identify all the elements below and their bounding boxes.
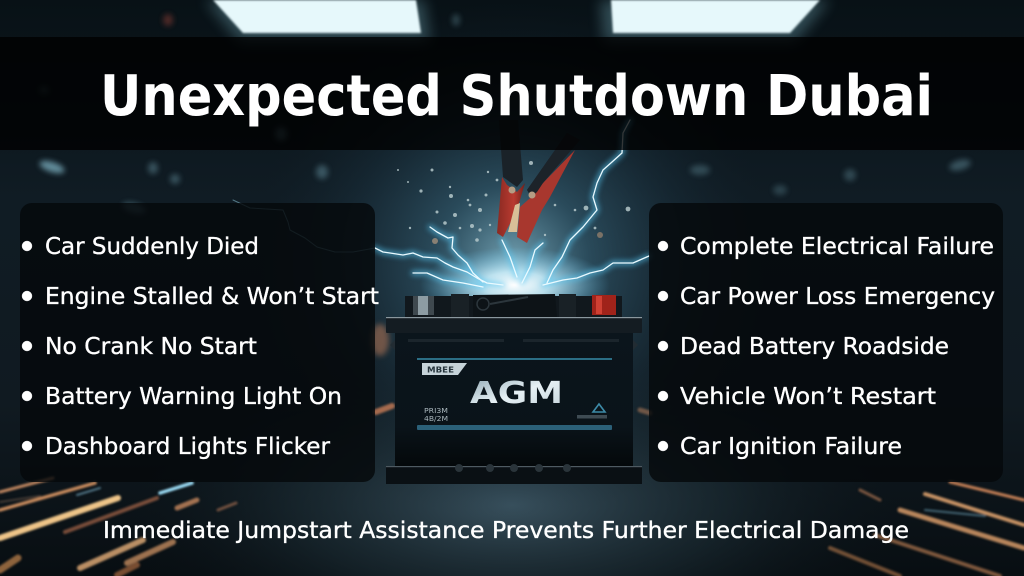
bokeh dots xyxy=(38,14,972,216)
battery: top ridge xyxy=(405,296,622,317)
battery: body xyxy=(395,333,633,467)
battery: negative terminal xyxy=(413,296,434,315)
floor light streaks: left xyxy=(0,406,392,575)
battery: spec text: PRI3M xyxy=(424,407,448,415)
clamp: left handle xyxy=(499,120,523,187)
item: dashboard lights: Dashboard Lights Flicker xyxy=(45,432,330,460)
battery: top stripe xyxy=(417,358,612,360)
item: car suddenly died: Car Suddenly Died xyxy=(45,232,259,260)
footer message: Immediate Jumpstart Assistance Prevents Further Electrical Damage xyxy=(103,516,909,544)
lightning: glow xyxy=(375,120,649,287)
item: ignition failure: Car Ignition Failure xyxy=(680,432,902,460)
item: battery warning: Battery Warning Light On xyxy=(45,382,342,410)
header band xyxy=(0,37,1024,150)
title: Unexpected Shutdown Dubai xyxy=(100,64,933,129)
item: dead battery: Dead Battery Roadside xyxy=(680,332,949,360)
battery: base xyxy=(386,467,642,484)
battery: positive terminal xyxy=(592,295,616,315)
floor light streaks: right xyxy=(640,410,1024,576)
sparks xyxy=(397,161,630,244)
energy glow behind battery xyxy=(420,247,610,323)
lightning: white core xyxy=(375,120,649,287)
battery: spec text xyxy=(424,407,448,423)
item: won't restart: Vehicle Won’t Restart xyxy=(680,382,936,410)
battery: AGM logo: AGM xyxy=(470,376,563,411)
battery: label tag xyxy=(422,363,467,375)
battery: bottom stripe xyxy=(417,425,612,430)
clamp: pivot rivets xyxy=(508,186,516,194)
jumper clamps xyxy=(497,120,580,243)
panel: right symptoms xyxy=(649,203,1003,482)
battery: lid xyxy=(386,317,642,333)
ceiling lights xyxy=(205,0,830,42)
lightning bolts xyxy=(233,120,649,287)
AGM battery xyxy=(386,294,642,484)
clamp: right handle xyxy=(527,133,580,200)
clamp: jaw spark xyxy=(508,203,520,232)
item: power loss: Car Power Loss Emergency xyxy=(680,282,995,310)
item: no crank: No Crank No Start xyxy=(45,332,257,360)
panel: left symptoms xyxy=(20,203,379,482)
item: engine stalled: Engine Stalled & Won’t Start xyxy=(45,282,379,310)
orange side glow xyxy=(371,324,389,356)
battery: recycle mark xyxy=(593,404,605,412)
item: electrical failure: Complete Electrical Failure xyxy=(680,232,994,260)
battery: label tag: MBEE xyxy=(427,366,454,374)
lightning: faint bolt behind left panel xyxy=(233,200,375,252)
battery: spec text: 4B/2M xyxy=(424,415,448,423)
